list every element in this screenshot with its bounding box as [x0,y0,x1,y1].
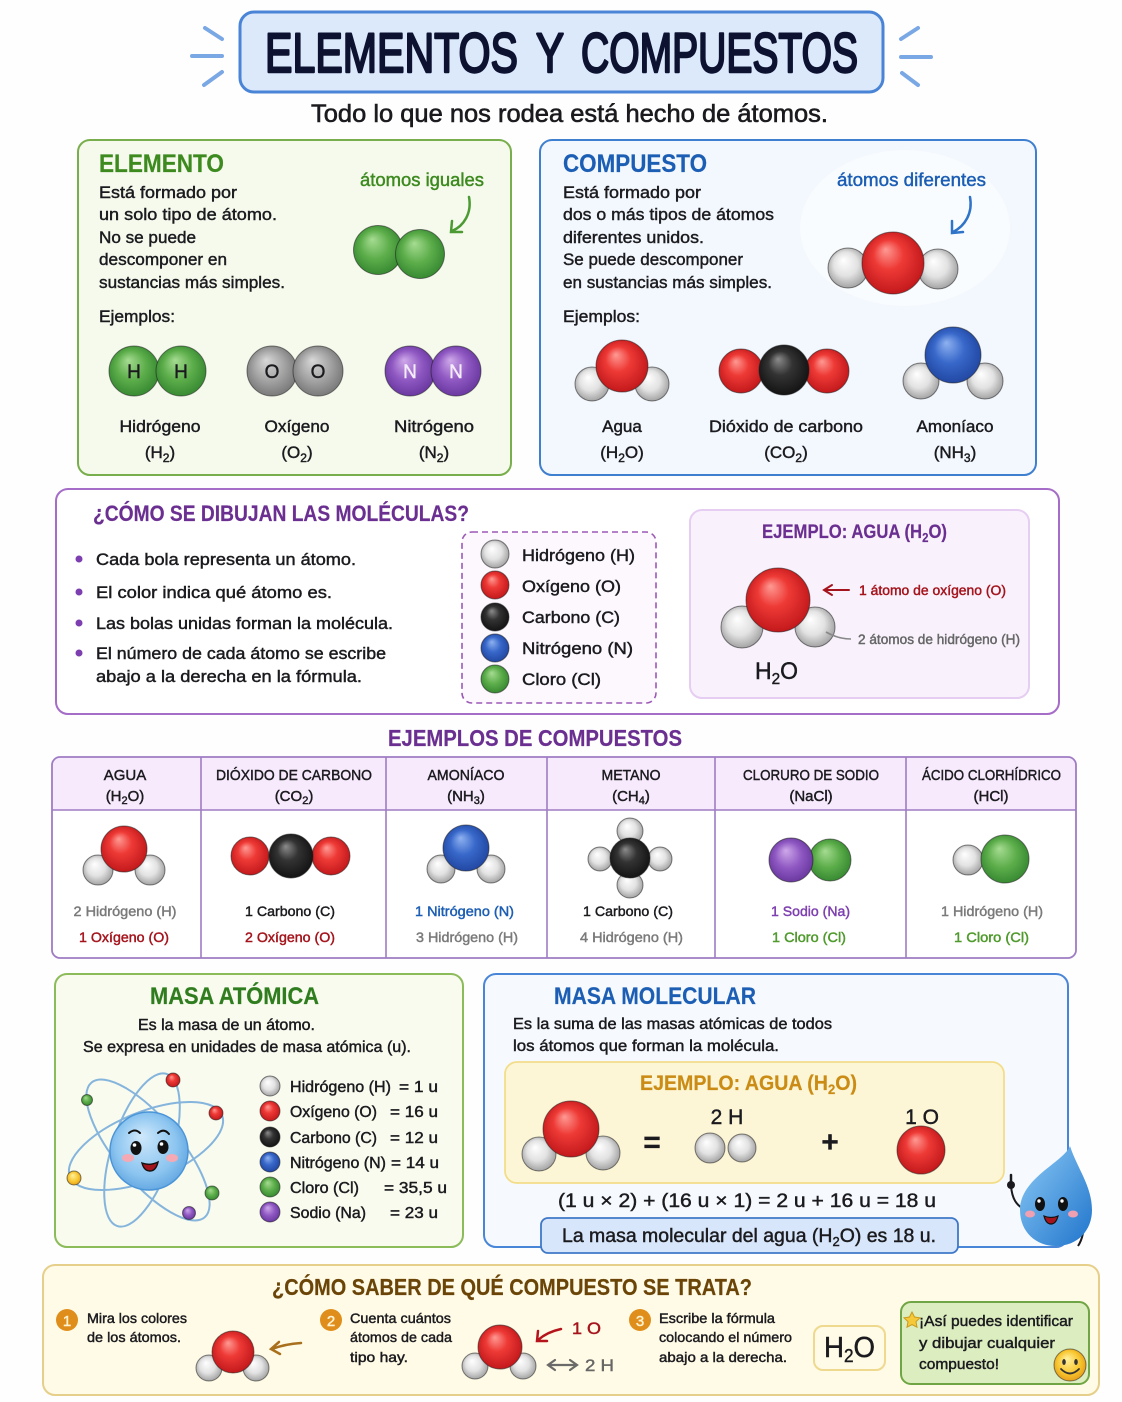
list: masas atómicas: = 14 u [391,1155,439,1172]
atoms: 1 O [897,1106,945,1174]
step 2: 1 O [572,1319,601,1338]
result banner: O) es 18 u. [840,1225,936,1247]
subtitle: Todo lo que nos rodea está hecho de átomos. [311,100,828,128]
legend: átomos [462,532,656,703]
panel: compuesto [540,140,1036,475]
step 3: abajo a la derecha. [659,1349,787,1365]
labels: compuestos: ) [971,443,976,462]
molecule: N2 [385,346,481,396]
column: cloruro de sodio: (NaCl) [789,788,833,805]
molecule: agua [575,340,669,401]
step 1: Mira los colores [87,1310,187,1326]
list: masas atómicas: = 35,5 u [384,1180,447,1197]
molecule: átomos iguales [354,226,444,278]
column: metano: ) [645,788,650,805]
heading: ejemplo agua: EJEMPLO: AGUA (H [762,522,944,543]
column: amoníaco: (NH [447,788,474,805]
column: metano: 4 Hidrógeno (H) [580,929,683,945]
result banner: La masa molecular del agua (H [562,1225,833,1247]
atoms: 1 O: 1 O [905,1106,939,1129]
title banner: ELEMENTOS [265,21,518,84]
heading: ejemplos de compuestos: EJEMPLOS DE COMPUESTOS [388,725,682,751]
panel: elemento [78,140,511,475]
list: masas atómicas [260,1076,447,1222]
callout: átomos iguales: átomos iguales [360,170,484,190]
arrow: oxígeno [824,585,849,595]
column: metano: 1 Carbono (C) [583,903,673,919]
step 3: colocando el número [659,1329,792,1345]
label: ejemplos: Ejemplos: [563,307,640,326]
step 1: 1 [63,1313,71,1330]
line: hidrógeno [826,632,851,639]
step 1: de los átomos. [87,1329,181,1345]
list: masas atómicas: Oxígeno (O) [290,1104,377,1121]
step 3: H [824,1332,845,1364]
labels: elementos: 2 [163,451,170,465]
step 2: 2 [327,1313,335,1330]
definition: elemento: descomponer en [99,250,227,269]
list: masas atómicas: Cloro (Cl) [290,1180,359,1197]
definition: compuesto: dos o más tipos de átomos [563,205,774,224]
list: masas atómicas: = 16 u [390,1104,438,1121]
icon: átomo sonriente [57,1062,235,1238]
result banner: 2 [832,1234,840,1249]
title banner [240,12,883,92]
title banner: Y [536,21,564,84]
formula: H2O: O [780,658,798,685]
column: amoníaco: 3 Hidrógeno (H) [416,929,518,945]
definition: elemento: sustancias más simples. [99,273,285,292]
column: metano [580,767,683,945]
bullet list: abajo a la derecha en la fórmula. [96,668,362,686]
definition: compuesto: en sustancias más simples. [563,273,772,292]
labels: elementos: 2 [300,451,307,465]
column: agua: 1 Oxígeno (O) [79,929,169,945]
column: dióxido de carbono: 1 Carbono (C) [245,903,335,919]
definition: compuesto: Se puede descomponer [563,250,743,269]
column: ácido clorhídrico: ÁCIDO CLORHÍDRICO [922,767,1061,784]
formula: H2O: 2 [772,671,780,688]
step 2: tipo hay. [350,1349,408,1365]
molecule: H2: H [127,362,141,383]
column: agua: AGUA [104,767,146,784]
panel: cómo se dibujan [56,489,1059,714]
column: amoníaco: 3 [474,795,480,807]
plus sign: + [821,1126,839,1159]
column: agua: 2 [122,795,128,807]
legend: átomos: Carbono (C) [522,608,620,627]
column: metano: (CH [612,788,639,805]
column: cloruro de sodio: 1 Cloro (Cl) [772,929,846,945]
bullet list: Las bolas unidas forman la molécula. [96,615,393,633]
labels: elementos: (O [281,443,300,462]
column: ácido clorhídrico: (HCl) [974,788,1008,805]
table: ejemplos de compuestos [52,757,1076,958]
labels: compuestos: (CO [764,443,795,462]
list: masas atómicas: = 12 u [390,1130,438,1147]
callout: átomos diferentes: átomos diferentes [837,170,986,190]
column: agua: 2 Hidrógeno (H) [74,903,176,919]
step 3 [629,1309,885,1370]
callout: conclusión: compuesto! [919,1356,999,1373]
bullet list: El color indica qué átomo es. [96,584,332,602]
panel: cómo saber de qué compuesto se trata [43,1265,1099,1395]
step 3: 3 [636,1313,644,1330]
title rays [192,28,931,85]
step 1 [56,1309,301,1381]
definition: masa atómica: Se expresa en unidades de masa atómica (u). [83,1039,411,1056]
definition: masa molecular: Es la suma de las masas atómicas de todos [513,1016,832,1033]
molecule: NH3 [903,327,1003,399]
definition: elemento: Está formado por [99,183,237,202]
column: dióxido de carbono: ) [308,788,313,805]
definition: compuesto [563,183,774,292]
icon: gota sonriente [1007,1146,1092,1246]
column: metano: METANO [602,767,660,784]
column: ácido clorhídrico: 1 Cloro (Cl) [954,929,1029,945]
labels: elementos: ) [443,443,449,462]
labels: elementos: Nitrógeno [394,417,474,436]
definition: compuesto: diferentes unidos. [563,228,704,247]
step 3: Escribe la fórmula [659,1310,775,1326]
heading: cómo se dibujan: ¿CÓMO SE DIBUJAN LAS MOLÉCULAS? [93,501,469,526]
labels: compuestos: (H [600,443,618,462]
labels: elementos: Oxígeno [264,417,330,436]
step 2: Cuenta cuántos [350,1310,451,1326]
labels: elementos: 2 [437,451,444,465]
list: masas atómicas: Sodio (Na) [290,1205,366,1222]
definition: masa atómica [83,1017,411,1056]
definition: elemento: un solo tipo de átomo. [99,205,277,224]
molecule: H2: H [174,362,188,383]
heading: ejemplo agua: O) [928,522,947,543]
bullet list: El número de cada átomo se escribe [96,645,386,663]
column: agua [74,767,176,945]
molecule: CO2 [719,345,849,395]
labels: compuestos: 3 [964,451,971,465]
labels: elementos: Hidrógeno [120,417,200,436]
labels: compuestos: O) [625,443,644,462]
label: hidrógeno: 2 átomos de hidrógeno (H) [858,632,1020,647]
example box: agua [505,1062,1004,1183]
definition: elemento [99,183,285,292]
labels: compuestos: Amoníaco [916,417,994,436]
column: agua: O) [128,788,144,805]
column: amoníaco [415,767,518,945]
label: ejemplos: Ejemplos: [99,307,175,326]
column: agua: (H [106,788,122,805]
column: amoníaco: AMONÍACO [428,767,504,784]
molecule: H2 [109,346,206,396]
labels: compuestos: 2 [795,451,802,465]
molecule: N2: N [449,362,463,383]
calculation: (1 u × 2) + (16 u × 1) = 2 u + 16 u = 18 u [558,1191,936,1212]
example box: agua [690,510,1029,698]
heading: elemento: ELEMENTO [99,150,224,178]
molecule: átomos diferentes [828,232,958,294]
heading: ejemplo agua: 2 [922,530,928,545]
atoms: 2 H [695,1106,756,1163]
callout: conclusión: y dibujar cualquier [919,1335,1055,1352]
labels: compuestos: Agua [602,417,642,436]
labels: elementos: (H [145,443,163,462]
legend: átomos: Nitrógeno (N) [522,639,633,658]
labels: compuestos: ) [802,443,808,462]
column: dióxido de carbono: (CO [275,788,302,805]
heading: ejemplo agua: EJEMPLO: AGUA (H [640,1072,841,1095]
heading: masa molecular: MASA MOLECULAR [554,983,756,1010]
labels: elementos: ) [307,443,313,462]
step 2 [320,1309,614,1379]
panel: masa atómica [55,974,463,1247]
labels: elementos: ) [169,443,175,462]
arrow: átomos diferentes [952,197,971,233]
definition: compuesto: Está formado por [563,183,701,202]
step 3: 2 [844,1346,854,1366]
molecule: O2 [247,346,343,396]
column: dióxido de carbono: 2 [302,795,308,807]
column: dióxido de carbono: DIÓXIDO DE CARBONO [216,767,372,784]
column: metano: 4 [639,795,645,807]
step 3: O [854,1332,875,1364]
heading: cómo saber: ¿CÓMO SABER DE QUÉ COMPUESTO SE TRATA? [272,1273,752,1300]
list: masas atómicas: = 23 u [390,1205,438,1222]
step 2: átomos de cada [350,1329,452,1345]
column: ácido clorhídrico: 1 Hidrógeno (H) [941,903,1043,919]
list: masas atómicas: = 1 u [399,1079,438,1096]
molecule: agua [721,568,835,648]
bullet list [76,551,393,686]
labels: compuestos: Dióxido de carbono [709,417,863,436]
molecule: O2: O [265,362,279,383]
definition: masa molecular: los átomos que forman la molécula. [513,1038,779,1055]
panel: masa molecular [484,974,1068,1247]
molecule: N2: N [403,362,417,383]
icon: carita sonriente [1054,1349,1086,1381]
labels: compuestos [600,417,994,465]
label: oxígeno: 1 átomo de oxígeno (O) [859,583,1006,598]
column: amoníaco: ) [480,788,485,805]
column: dióxido de carbono [216,767,372,945]
definition: masa molecular [513,1016,832,1055]
labels: compuestos: (NH [934,443,964,462]
labels: compuestos: 2 [618,451,625,465]
heading: ejemplo agua: 2 [828,1081,835,1097]
formula: H2O: H [755,658,772,685]
column: ácido clorhídrico [922,767,1061,945]
heading: ejemplo agua: O) [835,1072,857,1095]
callout: conclusión: ¡Así puedes identificar [919,1313,1073,1330]
legend: átomos: Hidrógeno (H) [522,546,635,565]
arrow: átomos iguales [451,197,470,232]
labels: elementos [120,417,474,465]
column: cloruro de sodio: 1 Sodio (Na) [771,903,850,919]
callout: conclusión [901,1302,1089,1384]
definition: masa atómica: Es la masa de un átomo. [138,1017,315,1034]
step 2: 2 H [585,1356,614,1375]
atoms: 2 H: 2 H [711,1106,743,1129]
molecule: O2: O [311,362,325,383]
heading: masa atómica: MASA ATÓMICA [150,982,319,1010]
list: masas atómicas: Nitrógeno (N) [290,1155,386,1172]
column: amoníaco: 1 Nitrógeno (N) [415,903,514,919]
title banner: COMPUESTOS [581,21,858,84]
column: cloruro de sodio [743,767,879,945]
result banner [541,1218,958,1253]
legend: átomos: Oxígeno (O) [522,577,621,596]
column: cloruro de sodio: CLORURO DE SODIO [743,767,879,784]
molecule: agua [522,1101,620,1171]
equals sign: = [643,1126,661,1159]
list: masas atómicas: Carbono (C) [290,1130,377,1147]
bullet list: Cada bola representa un átomo. [96,551,356,569]
labels: elementos: (N [419,443,437,462]
legend: átomos: Cloro (Cl) [522,670,601,689]
column: dióxido de carbono: 2 Oxígeno (O) [245,929,335,945]
definition: elemento: No se puede [99,228,196,247]
heading: compuesto: COMPUESTO [563,150,707,178]
list: masas atómicas: Hidrógeno (H) [290,1079,391,1096]
